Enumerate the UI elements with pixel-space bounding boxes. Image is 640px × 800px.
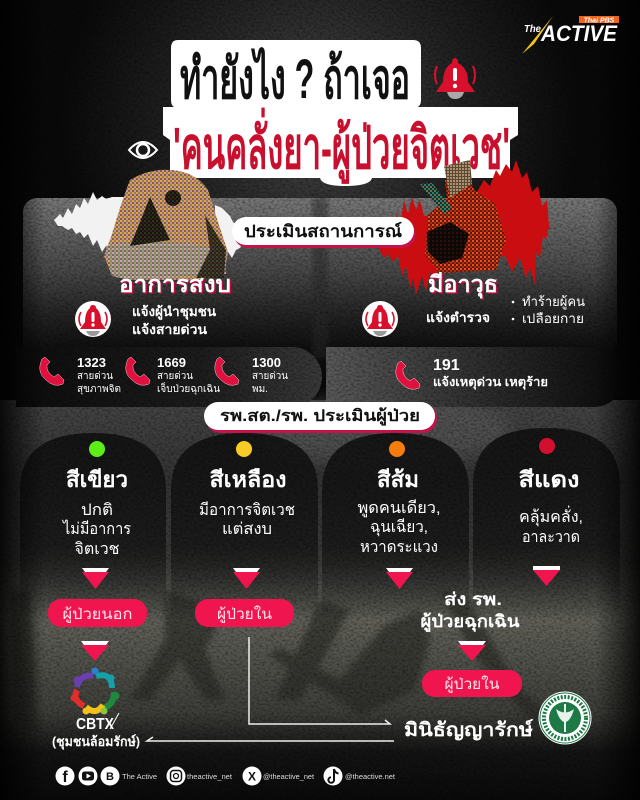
- hotline 1300: สายด่วน: [252, 371, 288, 382]
- hotline 191: 191: [433, 357, 460, 374]
- arrow: to inpatient: [458, 641, 486, 661]
- column: orange: [358, 441, 440, 556]
- arrow: yellow down: [233, 568, 260, 589]
- icon: youtube: [78, 766, 98, 786]
- hotline 1300: 1300: [252, 355, 281, 370]
- heading: calm symptoms: อาการสงบ: [120, 272, 232, 298]
- column: yellow: [199, 441, 295, 538]
- text: community surrounding care: (ชุมชนล้อมรักษ์): [52, 734, 140, 750]
- handle: The Active: The Active: [122, 774, 157, 781]
- icon: eye: [129, 142, 157, 158]
- text: notify police: แจ้งตำรวจ: [426, 310, 490, 325]
- logo: The Active Thai PBS: [522, 16, 619, 54]
- icon: facebook: [56, 766, 74, 786]
- pill: inpatient yellow: [195, 599, 294, 627]
- hotline 1669: 1669: [157, 355, 186, 370]
- hotline 191: แจ้งเหตุด่วน เหตุร้าย: [433, 375, 548, 390]
- panel: hotline capsule left: [16, 347, 322, 407]
- hotline 1669: เจ็บป่วยฉุกเฉิน: [157, 381, 220, 395]
- text: notify community leader and hotline: [132, 304, 216, 337]
- arrow: outpatient to CBTx: [81, 641, 109, 661]
- handle: tiktok: @theactive.net: [345, 774, 395, 781]
- column: orange: สีส้ม: [377, 467, 419, 492]
- column: yellow: แต่สงบ: [222, 521, 272, 538]
- panel: assess situation: [23, 198, 617, 358]
- icon: X: X: [248, 770, 256, 784]
- hotline 1300: พม.: [252, 384, 268, 395]
- social row: [56, 766, 395, 786]
- text: assault and nudity list: ทำร้ายผู้คน: [522, 294, 585, 310]
- panel: four triage columns: [20, 428, 620, 640]
- column: green: จิตเวช: [74, 541, 120, 558]
- icon: alarm bell left: [75, 301, 111, 337]
- panel: hotline capsule right: [326, 347, 624, 407]
- hotline 1323: สุขภาพจิต: [77, 384, 121, 395]
- title box line 2: [163, 107, 518, 186]
- text: send to emergency hospital: ผู้ป่วยฉุกเฉิน: [420, 612, 520, 633]
- heading: calm symptoms: อาการสงบ: [119, 271, 231, 297]
- heading pill: hospital assesses patient: [204, 402, 437, 433]
- hotline 1300: [252, 355, 288, 395]
- text: assault and nudity list: [512, 294, 585, 326]
- column: yellow: มีอาการจิตเวช: [199, 501, 295, 519]
- heading pill: hospital assesses patient: รพ.สต./รพ. ประเมินผู้ป่วย: [220, 407, 420, 427]
- hotline 1669: สายด่วน: [157, 371, 193, 382]
- icon: alarm bell right: [362, 301, 398, 337]
- column: green: [61, 441, 131, 558]
- column: orange: พูดคนเดียว,: [358, 499, 440, 518]
- arrow: Mini Thanyarak back to community: [147, 737, 394, 741]
- column: yellow: สีเหลือง: [210, 467, 286, 492]
- pill: inpatient yellow: ผู้ป่วยใน: [217, 605, 272, 623]
- title box line 1: ทำยังไง ? ถ้าเจอ: [180, 46, 410, 110]
- text: send to emergency hospital: ส่ง รพ.: [444, 590, 502, 609]
- heading: armed: มีอาวุธ: [428, 271, 498, 299]
- logo: The Active Thai PBS: Thai PBS: [584, 18, 615, 24]
- icon: facebook: f: [62, 769, 68, 786]
- column: green: ไม่มีอาการ: [61, 519, 131, 538]
- heading pill: assess situation: [232, 217, 416, 248]
- column: red: [518, 438, 583, 546]
- column: red: คลุ้มคลั่ง,: [519, 505, 583, 527]
- text: assault and nudity list: เปลือยกาย: [522, 311, 584, 326]
- column: orange: หวาดระแวง: [360, 539, 438, 556]
- logo: CBTx: CBTX: [76, 716, 114, 733]
- icon: tiktok: [324, 766, 342, 786]
- icon: phone 4: [396, 361, 420, 389]
- icon: X: [242, 766, 262, 786]
- waveform: red: [378, 160, 549, 295]
- column: orange: ฉุนเฉียว,: [370, 518, 428, 537]
- figure: calm person hunched: [104, 170, 228, 280]
- icon: alarm bell top: [435, 58, 475, 99]
- arrow: red down: [533, 566, 560, 586]
- hotline 1323: [77, 355, 121, 395]
- column: green: สีเขียว: [66, 467, 128, 492]
- arrow: inpatient to Mini Thanyarak: [249, 637, 390, 724]
- heading pill: assess situation: ประเมินสถานการณ์: [244, 221, 402, 241]
- icon: phone 3: [215, 357, 239, 385]
- logo: CBTx: [70, 668, 120, 733]
- figure: person with weapon: [420, 160, 506, 273]
- arrow: orange down: [386, 568, 413, 589]
- heading: armed: มีอาวุธ: [430, 272, 500, 300]
- handle: X: @theactive_net: [263, 774, 314, 781]
- logo: The Active Thai PBS: The: [524, 24, 541, 35]
- logo: The Active Thai PBS: ACTIVE: [540, 21, 618, 46]
- icon: blockdit: [100, 766, 120, 786]
- handle: instagram: theactive_net: [187, 774, 232, 781]
- text: notify community leader and hotline: แจ้งสายด่วน: [132, 322, 207, 337]
- hotline 1323: สายด่วน: [77, 371, 113, 382]
- hotline 191: [433, 357, 548, 390]
- column: green: ปกติ: [81, 502, 113, 519]
- icon: instagram: [166, 766, 186, 786]
- arrow: green down: [82, 568, 109, 589]
- waveform: white: [54, 192, 245, 262]
- pill: inpatient orange red: ผู้ป่วยใน: [444, 675, 500, 693]
- text: notify community leader and hotline: แจ้งผู้นำชุมชน: [132, 304, 216, 320]
- pill: outpatient: ผู้ป่วยนอก: [62, 606, 132, 623]
- icon: phone 1: [40, 357, 64, 385]
- text: send to emergency hospital: [420, 590, 520, 633]
- column: red: สีแดง: [518, 467, 580, 492]
- logo: Ministry of Public Health seal: [538, 692, 592, 744]
- pill: outpatient: [48, 599, 147, 627]
- hotline 1669: [157, 355, 220, 395]
- icon: blockdit: B: [106, 771, 114, 783]
- pill: inpatient orange red: [422, 670, 522, 697]
- text: Mini Thanyarak: มินิธัญญารักษ์: [404, 719, 534, 741]
- title box line 1: [171, 40, 421, 110]
- icon: phone 2: [126, 357, 150, 385]
- column: red: อาละวาด: [522, 529, 580, 546]
- hotline 1323: 1323: [77, 355, 106, 370]
